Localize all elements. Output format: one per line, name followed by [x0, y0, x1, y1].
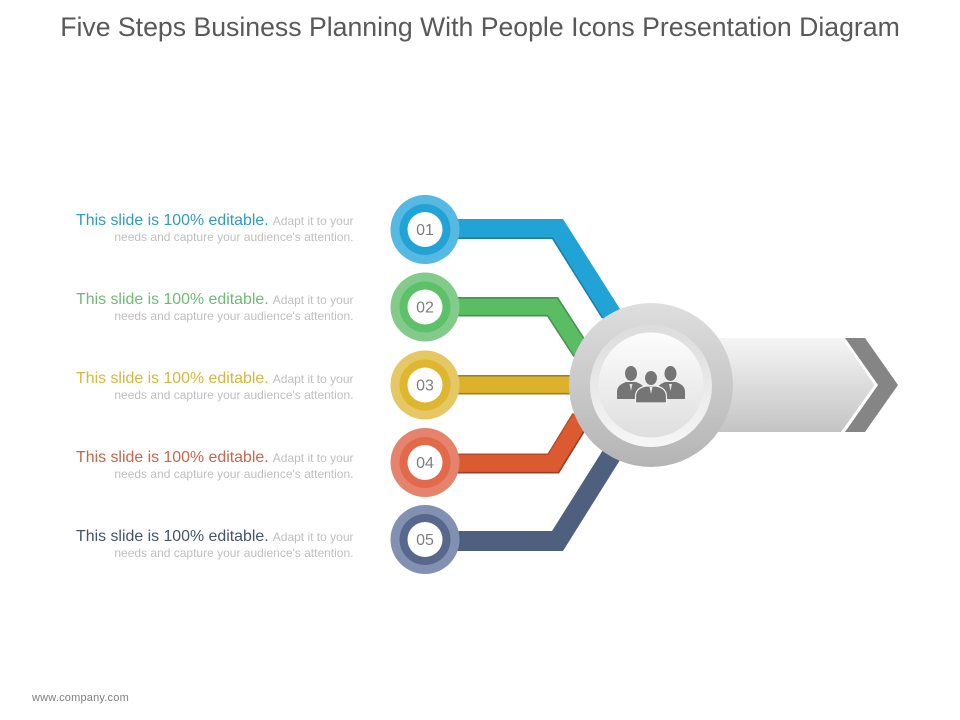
- text block 02: This slide is 100% editable. Adapt it to your: [76, 290, 354, 308]
- text block 05: needs and capture your audience's attention.: [114, 546, 354, 560]
- title: Five Steps Business Planning With People Icons Presentation Diagram: [60, 12, 900, 42]
- connector 02: [440, 297, 590, 357]
- node 01: [390, 195, 460, 264]
- text block 01: needs and capture your audience's attention.: [114, 230, 354, 244]
- text block 01: This slide is 100% editable. Adapt it to your: [76, 212, 354, 228]
- text block 03: This slide is 100% editable. Adapt it to your: [76, 370, 354, 386]
- node 02: 02: [416, 300, 434, 316]
- footer url: www.company.com: [32, 692, 129, 704]
- node 01: 01: [416, 222, 434, 239]
- arrow body: [700, 338, 874, 432]
- text block 03: needs and capture your audience's attention.: [114, 388, 354, 402]
- text block 04: needs and capture your audience's attention.: [114, 467, 354, 481]
- connector 05: [440, 450, 620, 551]
- node 05: [390, 505, 460, 574]
- node 04: 04: [416, 455, 434, 472]
- node 04: [390, 428, 460, 497]
- text block 02: needs and capture your audience's attention.: [114, 309, 354, 323]
- text block 04: [76, 448, 354, 481]
- chevron: [845, 338, 898, 432]
- text block 02: [76, 290, 354, 323]
- connector 03: [440, 375, 580, 394]
- text block 05: This slide is 100% editable. Adapt it to your: [76, 528, 354, 544]
- node 05: 05: [416, 532, 434, 549]
- node 02: [390, 272, 460, 342]
- node 03: [390, 350, 460, 420]
- central hub: [569, 303, 733, 467]
- text block 01: [76, 212, 354, 244]
- node 03: 03: [416, 378, 434, 394]
- connector 01: [440, 219, 620, 319]
- text block 04: This slide is 100% editable. Adapt it to your: [76, 448, 354, 466]
- icon: people: [617, 366, 685, 403]
- text block 03: [76, 370, 354, 402]
- text block 05: [76, 528, 354, 560]
- connector 04: [440, 413, 590, 474]
